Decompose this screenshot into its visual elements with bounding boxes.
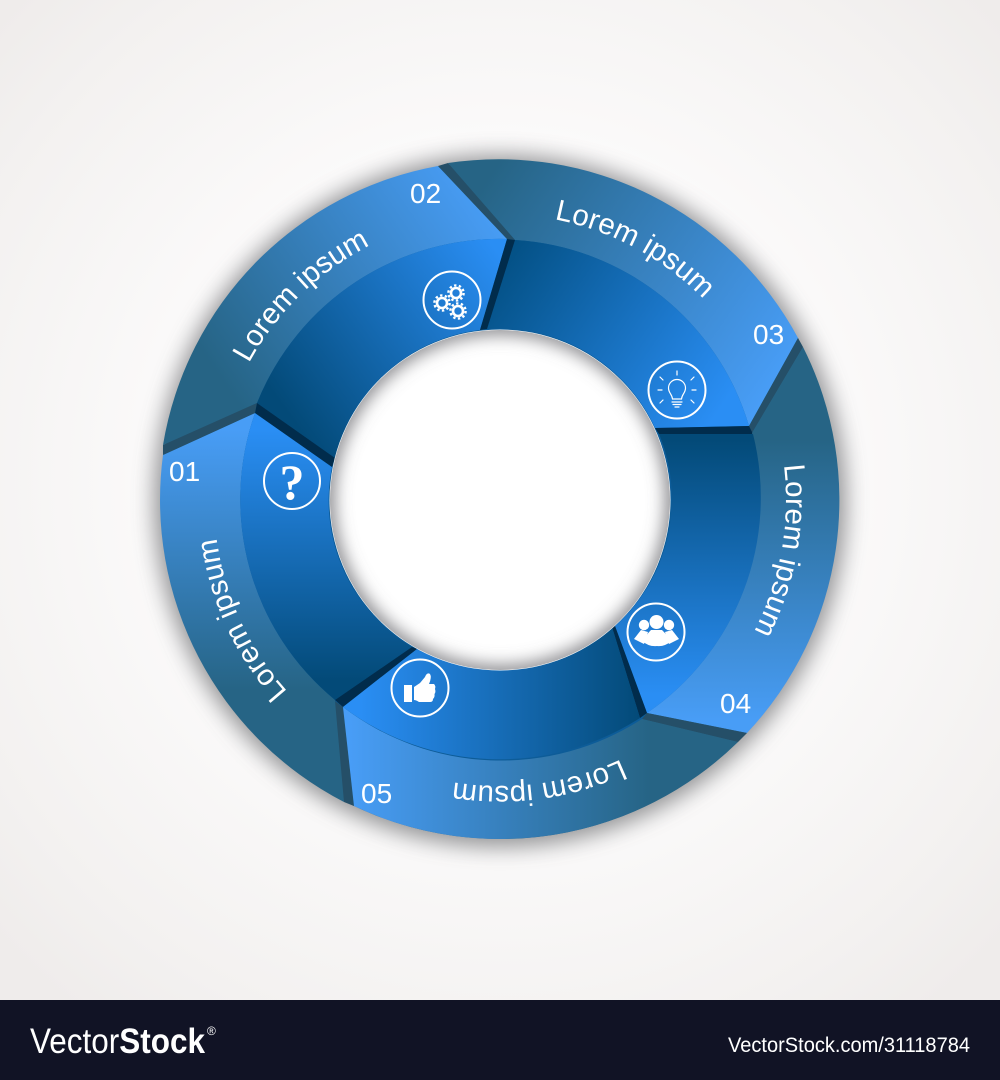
label 04: Lorem ipsum: [755, 466, 805, 636]
footer logo: VectorStock: [30, 1022, 205, 1061]
label 03: Lorem ipsum: [556, 200, 712, 298]
icon: people: [628, 604, 684, 660]
center hole: [325, 325, 675, 675]
ring chart: [160, 159, 840, 839]
icon: thumbs up: [392, 660, 448, 716]
label 02: Lorem ipsum: [232, 234, 368, 362]
segment 04: [612, 347, 840, 742]
ring drop shadow: [154, 155, 846, 847]
segment 03: [438, 159, 803, 434]
icon: question mark: [264, 453, 320, 510]
icon: question mark: ?: [280, 454, 304, 510]
segment 01: [160, 413, 417, 806]
icon: gears: [424, 272, 480, 328]
registered mark: ®: [207, 1024, 216, 1038]
segment 05: [343, 628, 738, 839]
label 05: Lorem ipsum: [454, 760, 627, 806]
footer bar: [0, 1000, 1000, 1080]
footer image id: VectorStock.com/31118784: [728, 1034, 970, 1057]
number 02: 02: [410, 178, 441, 209]
number 03: 03: [753, 319, 784, 350]
number 01: 01: [169, 456, 200, 487]
number 05: 05: [361, 778, 392, 809]
icon: light bulb: [648, 362, 706, 418]
label 01: Lorem ipsum: [202, 540, 286, 703]
number 04: 04: [720, 688, 751, 719]
segment 02: [163, 166, 507, 467]
